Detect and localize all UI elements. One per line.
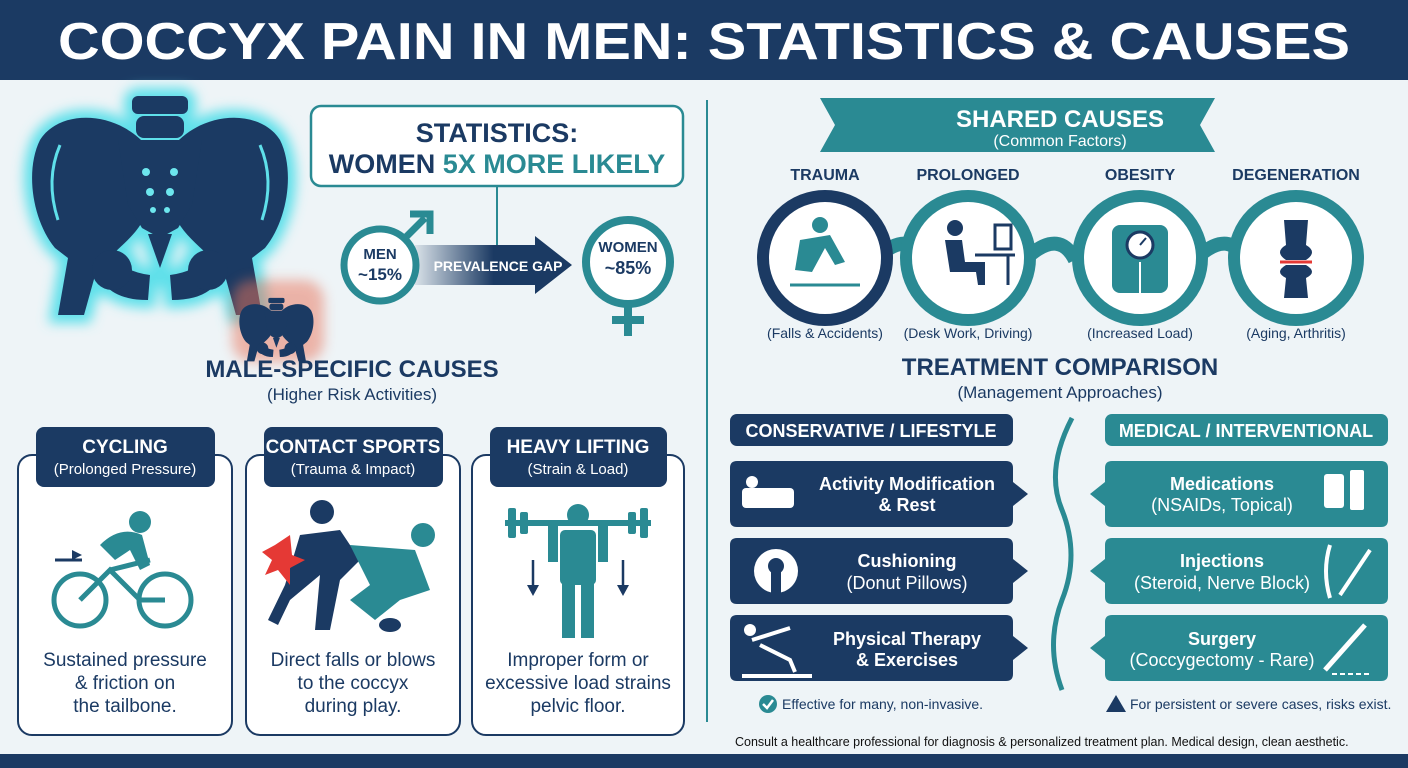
arrow: prevalence gap	[415, 236, 572, 294]
cause: prolonged	[904, 167, 1032, 341]
icon: female symbol	[586, 220, 670, 336]
card: injections: Injections	[1180, 551, 1264, 571]
heading: treatment comparison	[902, 354, 1218, 402]
conservative header: CONSERVATIVE / LIFESTYLE	[745, 421, 997, 441]
card: heavy lifting: pelvic floor.	[530, 696, 626, 717]
card: medications	[1090, 461, 1388, 527]
card: medications: Medications	[1170, 474, 1274, 494]
card: heavy lifting	[472, 427, 684, 735]
card: activity modification	[730, 461, 1028, 527]
cause: trauma: TRAUMA	[790, 167, 860, 184]
icon: pelvis	[32, 96, 288, 315]
heading: treatment comparison: TREATMENT COMPARISON	[902, 354, 1218, 381]
note: effective: Effective for many, non-invasive.	[782, 696, 983, 712]
icon: female symbol: ~85%	[605, 258, 651, 278]
card: cycling: (Prolonged Pressure)	[54, 461, 196, 478]
arrow: prevalence gap: PREVALENCE GAP	[434, 258, 562, 274]
ribbon: shared causes: SHARED CAUSES	[956, 106, 1164, 133]
medical header: MEDICAL / INTERVENTIONAL	[1119, 421, 1373, 441]
ribbon: shared causes: (Common Factors)	[993, 133, 1127, 150]
card: heavy lifting: excessive load strains	[485, 673, 671, 694]
cause: degeneration: DEGENERATION	[1232, 167, 1360, 184]
card: contact sports: to the coccyx	[298, 673, 409, 694]
card: cycling: Sustained pressure	[43, 650, 207, 671]
card: injections	[1090, 538, 1388, 604]
card: contact sports	[246, 427, 460, 735]
icon: small pelvis red	[232, 280, 324, 362]
heading: male-specific causes: (Higher Risk Activities)	[267, 385, 437, 404]
heading: treatment comparison: (Management Approaches)	[957, 383, 1163, 402]
icon: female symbol: WOMEN	[598, 239, 658, 256]
title bar: COCCYX PAIN IN MEN: STATISTICS & CAUSES	[58, 13, 1350, 71]
card: heavy lifting: (Strain & Load)	[528, 461, 628, 478]
card: cycling: CYCLING	[82, 437, 168, 458]
cause: obesity: (Increased Load)	[1087, 325, 1193, 341]
icon: male symbol: ~15%	[358, 265, 402, 284]
note: risks: For persistent or severe cases, risks exist.	[1130, 696, 1391, 712]
card: cushioning: (Donut Pillows)	[846, 573, 968, 593]
footer note: Consult a healthcare professional for diagnosis & personalized treatment plan. Medical design, clean aesthetic.	[735, 735, 1349, 749]
card: contact sports: Direct falls or blows	[271, 650, 435, 671]
cause: trauma: (Falls & Accidents)	[767, 325, 883, 341]
card: surgery	[1090, 615, 1388, 681]
card: medications: (NSAIDs, Topical)	[1151, 495, 1293, 515]
card: cushioning: Cushioning	[858, 551, 956, 571]
ribbon: shared causes	[820, 98, 1215, 152]
card: physical therapy: & Exercises	[856, 650, 958, 670]
title bar	[0, 0, 1408, 80]
cause: prolonged: PROLONGED	[916, 167, 1020, 184]
cause: degeneration	[1232, 167, 1360, 341]
card: contact sports: CONTACT SPORTS	[266, 437, 440, 458]
card: activity modification: Activity Modification	[819, 474, 995, 494]
card: cycling	[18, 427, 232, 735]
card: surgery: Surgery	[1188, 629, 1256, 649]
card: cycling: the tailbone.	[73, 696, 177, 717]
card: activity modification: & Rest	[878, 495, 936, 515]
card: physical therapy	[730, 615, 1028, 681]
card: heavy lifting: Improper form or	[507, 650, 649, 671]
cause: degeneration: (Aging, Arthritis)	[1246, 325, 1346, 341]
stats box: WOMEN 5X MORE LIKELY	[329, 149, 665, 179]
heading: male-specific causes	[205, 356, 499, 404]
card: contact sports: (Trauma & Impact)	[291, 461, 415, 478]
card: cycling: & friction on	[75, 673, 175, 694]
card: heavy lifting: HEAVY LIFTING	[507, 437, 649, 458]
card: cushioning	[730, 538, 1028, 604]
cause: prolonged: (Desk Work, Driving)	[904, 325, 1032, 341]
cause: obesity	[1078, 167, 1202, 341]
card: injections: (Steroid, Nerve Block)	[1134, 573, 1310, 593]
cause: obesity: OBESITY	[1105, 167, 1175, 184]
conservative header	[730, 414, 1013, 446]
card: physical therapy: Physical Therapy	[833, 629, 981, 649]
stats box: STATISTICS:	[416, 118, 578, 148]
card: surgery: (Coccygectomy - Rare)	[1129, 650, 1315, 670]
cause: trauma	[763, 167, 887, 341]
stats box	[311, 106, 683, 186]
card: contact sports: during play.	[305, 696, 401, 717]
heading: male-specific causes: MALE-SPECIFIC CAUSES	[205, 356, 499, 383]
medical header	[1105, 414, 1388, 446]
icon: male symbol	[344, 214, 430, 301]
icon: male symbol: MEN	[363, 246, 397, 263]
